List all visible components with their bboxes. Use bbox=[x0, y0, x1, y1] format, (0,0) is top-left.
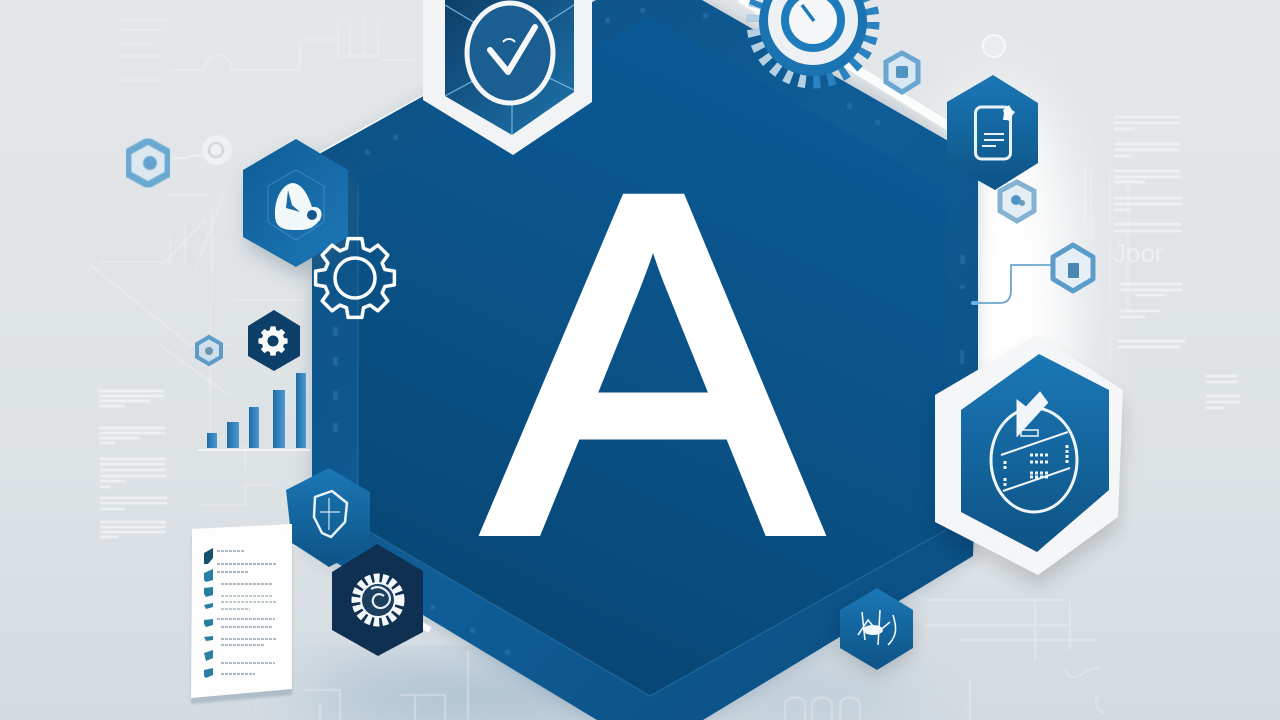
bar chart bbox=[198, 373, 310, 450]
bottom schematic bbox=[305, 600, 1105, 720]
helmet glyph bbox=[275, 183, 322, 230]
left text block bbox=[99, 391, 167, 537]
checklist paper bbox=[191, 524, 292, 704]
faint heading word: Joor bbox=[1113, 238, 1164, 268]
big letter A: A bbox=[487, 96, 821, 632]
icon: small ring hexagon left bbox=[197, 337, 221, 364]
icon: document hexagon bbox=[947, 75, 1038, 190]
inner hexagon panel bbox=[358, 17, 946, 696]
icon: dark gear hexagon bbox=[248, 310, 300, 371]
icon: connected hexagon bbox=[1053, 245, 1093, 291]
circular table icon bbox=[991, 392, 1077, 512]
check mark bbox=[490, 27, 535, 72]
right text block bbox=[1114, 117, 1240, 408]
right schematic bbox=[1085, 165, 1128, 360]
icon: small bottom hexagon bbox=[840, 588, 913, 676]
central hexagon bbox=[312, 0, 978, 720]
icon: bright shield hexagon bbox=[286, 468, 370, 567]
central hexagon shadow bbox=[312, 0, 978, 720]
border dots bbox=[333, 8, 965, 655]
icon: small ring hexagon bbox=[1000, 182, 1034, 221]
top-left schematic bbox=[90, 20, 415, 396]
icon: pale circle top right bbox=[983, 35, 1005, 57]
white edge highlights bbox=[318, 0, 955, 630]
icon: small blue hexagon top right bbox=[886, 53, 918, 92]
check ring bbox=[467, 3, 553, 103]
checklist text lines bbox=[217, 551, 277, 674]
lower-left schematic bbox=[200, 300, 320, 505]
icon: large white framed hexagon bbox=[935, 335, 1123, 587]
outer hexagon border bbox=[312, 0, 978, 720]
checklist icons bbox=[204, 548, 213, 678]
icon: check hexagon bbox=[423, 0, 592, 155]
icon: helmet hexagon bbox=[243, 139, 352, 277]
inner edge line bbox=[358, 185, 946, 696]
icon: blue gear gauge bbox=[753, 0, 873, 82]
icon: white outline gear bbox=[316, 239, 394, 317]
connector line bbox=[971, 265, 1052, 305]
icon: pale hexagon top left bbox=[128, 141, 168, 185]
icon: pale circle with connector bbox=[172, 135, 232, 165]
icon: dark spiral gear hexagon bbox=[332, 544, 423, 656]
